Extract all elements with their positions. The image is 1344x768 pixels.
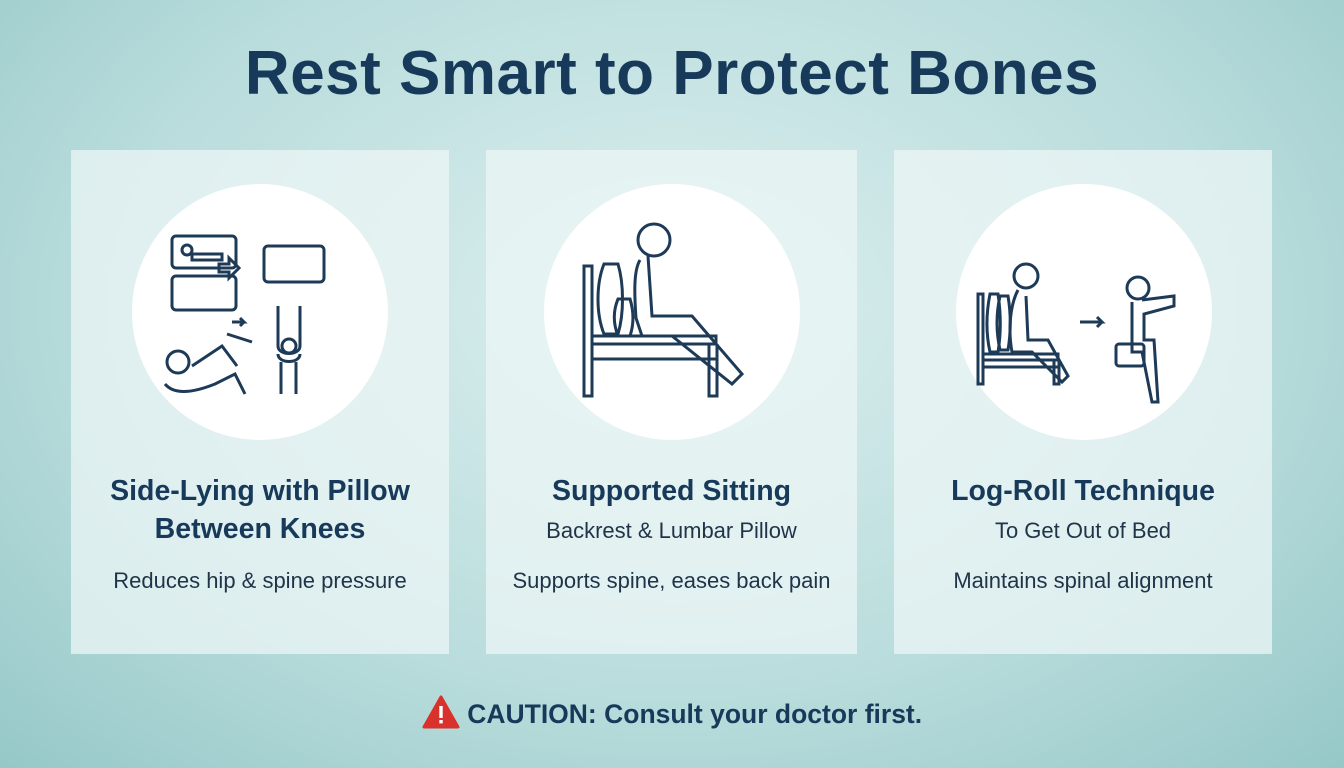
icon: log-roll circle: [956, 184, 1212, 440]
icon: sitting circle: [544, 184, 800, 440]
title: Rest Smart to Protect Bones: [245, 39, 1099, 108]
heading: [110, 475, 410, 545]
panel: log-roll: [894, 150, 1272, 654]
icon: side-lying circle: [132, 184, 388, 440]
subheading: Backrest & Lumbar Pillow: [546, 518, 797, 543]
panel: supported sitting: [486, 150, 857, 654]
description: Maintains spinal alignment: [953, 568, 1213, 593]
panel: side-lying: [71, 150, 449, 654]
subheading: To Get Out of Bed: [995, 518, 1171, 543]
heading: Between Knees: [155, 513, 365, 545]
caution: CAUTION: Consult your doctor first.: [467, 699, 922, 729]
heading: Side-Lying with Pillow: [110, 475, 410, 507]
description: Reduces hip & spine pressure: [113, 568, 407, 593]
description: Supports spine, eases back pain: [512, 568, 830, 593]
heading: Supported Sitting: [552, 475, 791, 507]
heading: Log-Roll Technique: [951, 475, 1215, 507]
